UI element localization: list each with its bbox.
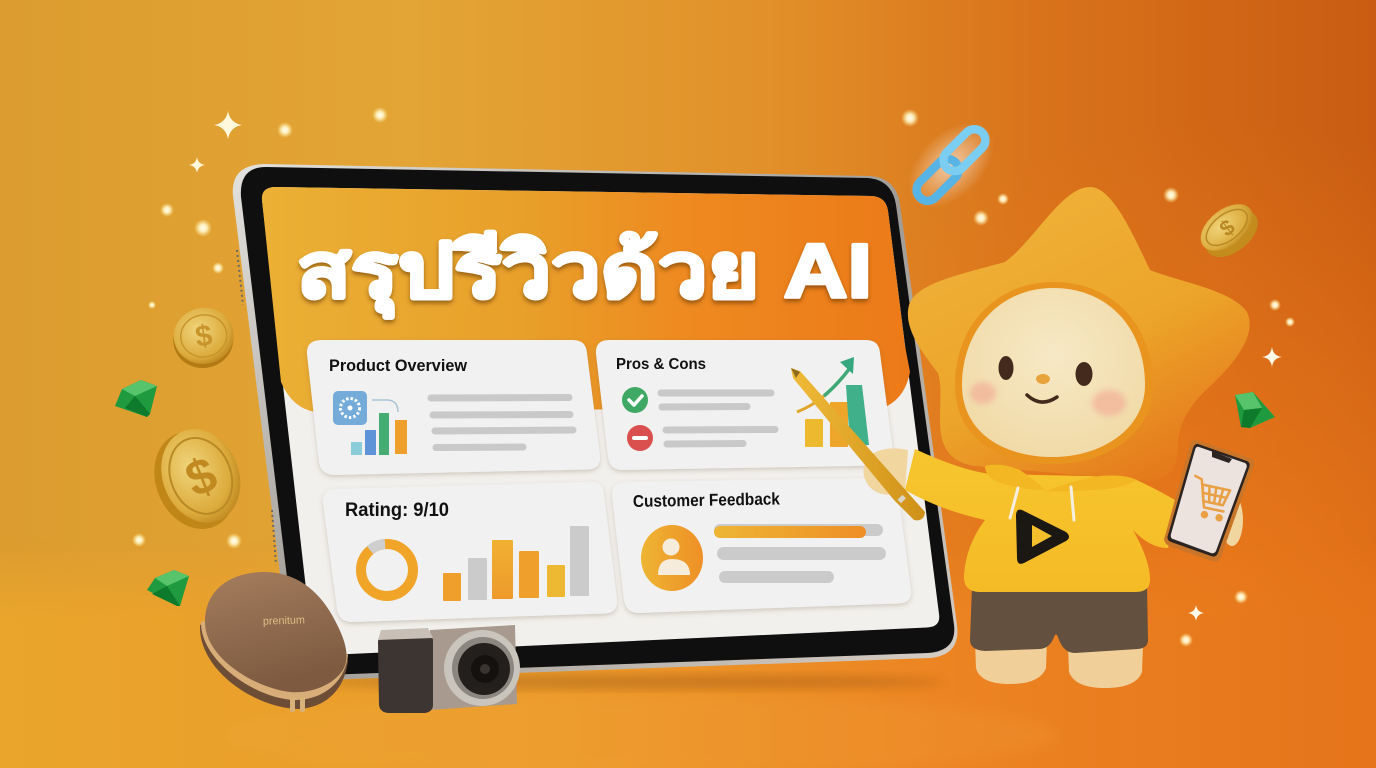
character	[863, 187, 1254, 688]
right hand	[1221, 494, 1243, 546]
link icon	[892, 106, 1010, 224]
text lines	[661, 393, 775, 444]
icon: con minus	[627, 425, 653, 451]
coin: large left	[140, 417, 255, 541]
heading: Product Overview	[329, 357, 467, 375]
coin: upper left	[169, 304, 238, 372]
smile	[1027, 395, 1057, 402]
star head	[908, 187, 1250, 481]
card: pros and cons	[596, 340, 893, 470]
legs	[975, 640, 1143, 688]
tablet side buttons	[237, 250, 276, 565]
stylus pen	[791, 368, 925, 520]
case brand text: prenitum	[263, 614, 305, 628]
rating bar	[714, 524, 883, 538]
nose	[1036, 374, 1050, 384]
text lines	[431, 398, 573, 448]
screen orange header	[262, 187, 910, 412]
tablet shadow on floor	[315, 675, 945, 689]
coin: upper right	[1192, 195, 1266, 266]
heading: Pros & Cons	[616, 356, 706, 373]
coin: upper right: $	[1215, 214, 1240, 241]
product: camera	[378, 625, 520, 713]
drawstrings	[1010, 487, 1074, 520]
title: สรุปรีวิวด้วย AI	[297, 229, 872, 319]
zipper pulls	[290, 697, 305, 712]
gem: left upper	[115, 380, 157, 417]
sparkles	[132, 107, 1295, 647]
shorts	[970, 586, 1148, 653]
hoodie play logo	[1016, 510, 1069, 564]
product: brown case	[200, 572, 348, 712]
donut chart	[361, 544, 413, 596]
face	[962, 288, 1145, 457]
heading: Rating: 9/10	[345, 500, 449, 521]
growth chart	[797, 357, 869, 447]
tablet rim	[233, 164, 957, 680]
coin: large left: $	[178, 446, 225, 508]
case upper shell	[205, 572, 347, 692]
phone	[1164, 440, 1254, 562]
eyes	[998, 356, 1092, 386]
bar chart	[443, 526, 589, 601]
card: customer feedback	[612, 478, 911, 613]
hood ring	[955, 282, 1153, 464]
hoodie	[905, 449, 1180, 592]
icon: shopping cart	[1187, 476, 1232, 521]
case lower shell	[200, 600, 348, 709]
tablet	[233, 164, 957, 680]
coin: upper left: $	[193, 319, 215, 354]
screen	[262, 187, 939, 655]
heading: Customer Feedback	[633, 489, 781, 511]
card: rating	[323, 482, 617, 622]
gem: left lower	[147, 570, 189, 606]
icon: blue gear badge and bars	[333, 391, 407, 455]
hood collar	[985, 465, 1137, 491]
gem: right	[1235, 392, 1275, 428]
tablet bezel	[241, 167, 954, 675]
case zip band	[201, 600, 348, 700]
text lines	[717, 547, 886, 583]
icon: pro check	[622, 387, 648, 413]
icon: user avatar	[641, 525, 703, 591]
cheeks	[970, 382, 1126, 416]
left hand	[863, 448, 908, 495]
card: product overview	[307, 340, 600, 475]
